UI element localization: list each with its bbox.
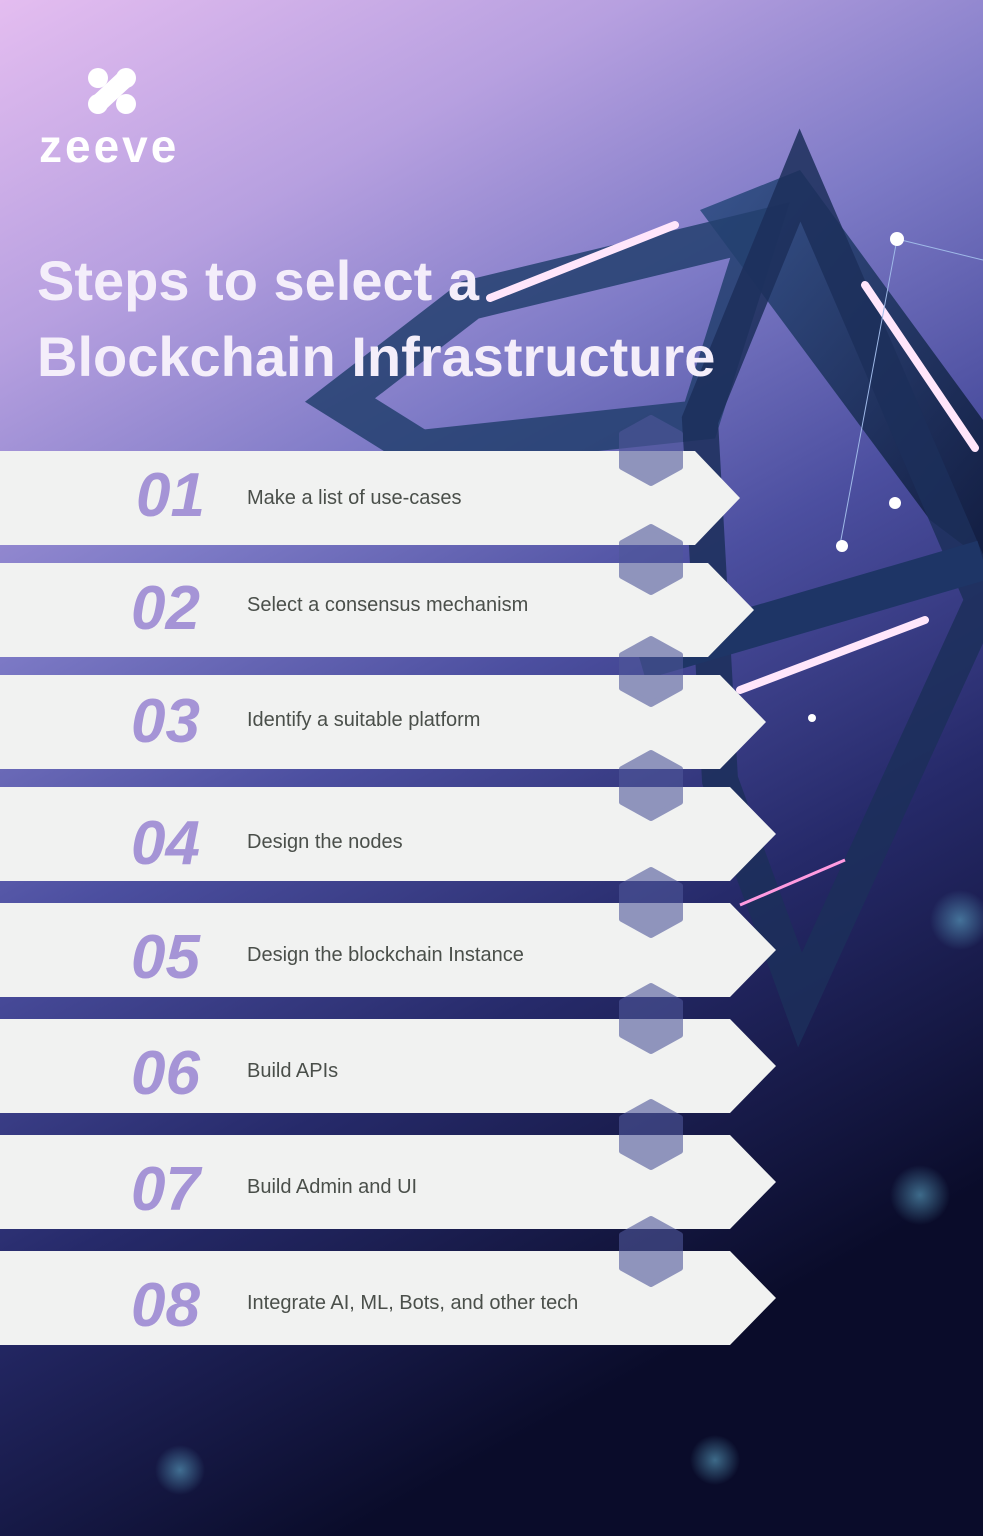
step 4	[0, 787, 776, 881]
logo	[39, 68, 179, 172]
step 6: Build APIs	[247, 1060, 338, 1082]
step 5	[0, 903, 776, 997]
step 1: 01	[136, 461, 205, 530]
step 8: Integrate AI, ML, Bots, and other tech	[247, 1292, 578, 1314]
step 2: Select a consensus mechanism	[247, 594, 528, 616]
step 2	[0, 563, 754, 657]
step 7: Build Admin and UI	[247, 1176, 417, 1198]
step 8: 08	[131, 1271, 200, 1340]
step 6	[0, 1019, 776, 1113]
title: Steps to select a	[37, 249, 480, 312]
step 7: 07	[131, 1155, 202, 1224]
hexagon markers	[622, 418, 680, 1284]
cube structure	[155, 170, 983, 1495]
step 3: 03	[131, 687, 200, 756]
step 3: Identify a suitable platform	[247, 709, 480, 731]
step 1: Make a list of use-cases	[247, 487, 462, 509]
step 5: Design the blockchain Instance	[247, 944, 524, 966]
title: Blockchain Infrastructure	[37, 325, 715, 388]
step 4: 04	[131, 809, 200, 878]
step 2: 02	[131, 574, 200, 643]
step 1	[0, 451, 740, 545]
logo: zeeve	[39, 120, 179, 172]
step 5: 05	[131, 923, 201, 992]
step 7	[0, 1135, 776, 1229]
step 6: 06	[131, 1039, 200, 1108]
title	[37, 249, 715, 388]
step 4: Design the nodes	[247, 831, 403, 853]
step 8	[0, 1251, 776, 1345]
step 3	[0, 675, 766, 769]
